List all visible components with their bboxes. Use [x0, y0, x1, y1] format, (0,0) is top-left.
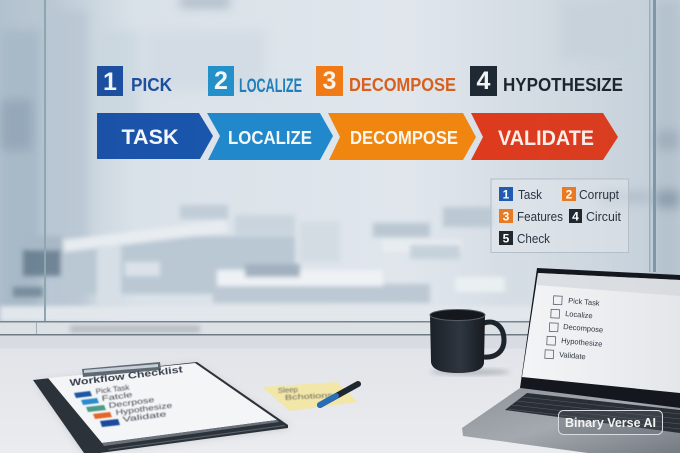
- step 3 badge and label: 3: [323, 67, 336, 95]
- chevron: task: TASK: [122, 126, 178, 149]
- legend item: corrupt: 2: [566, 188, 573, 202]
- legend item: check: 5: [503, 232, 510, 246]
- laptop lid: [520, 268, 680, 408]
- step 4 badge and label: HYPOTHESIZE: [503, 74, 623, 95]
- desk surface: [0, 336, 680, 453]
- laptop: Decompose: [563, 322, 603, 334]
- sticky note: [262, 382, 358, 411]
- step 2 badge and label: [208, 66, 302, 97]
- clipboard board: [33, 362, 288, 453]
- legend item: check: [499, 231, 550, 246]
- step 1 badge and label: PICK: [131, 75, 172, 95]
- coffee mug: [430, 310, 510, 376]
- sticky note: Bchotions: [285, 390, 333, 402]
- legend item: features: [499, 209, 563, 224]
- legend panel: [491, 179, 628, 252]
- laptop: Localize: [565, 309, 593, 320]
- chevron: localize: LOCALIZE: [228, 128, 312, 148]
- step 4 badge and label: 4: [477, 67, 491, 95]
- chevron: task: [97, 113, 213, 159]
- sticky note: Sleep: [278, 385, 298, 395]
- legend item: task: Task: [518, 187, 542, 202]
- checklist rows: Hypothesize: [115, 401, 173, 417]
- legend item: features: Features: [517, 209, 563, 224]
- chevron: validate: [471, 113, 618, 160]
- legend item: circuit: Circuit: [586, 209, 621, 224]
- keyboard: [505, 393, 680, 433]
- laptop: [462, 268, 680, 453]
- step 1 badge and label: 1: [103, 68, 117, 96]
- watermark: Binary Verse AI: Binary Verse AI: [565, 416, 656, 430]
- process chevrons: [97, 113, 618, 160]
- laptop: Validate: [559, 350, 586, 361]
- left dark shapes: [23, 250, 61, 276]
- step header row: [97, 66, 623, 97]
- checklist rows: [74, 383, 173, 427]
- distant bed: [213, 284, 430, 303]
- legend item: corrupt: Corrupt: [579, 187, 619, 202]
- checklist rows: Fatcle: [101, 390, 133, 403]
- legend item: task: [499, 187, 542, 202]
- window frame: [0, 0, 680, 336]
- metal clip: [82, 362, 161, 377]
- sticky note with pen: [262, 382, 358, 411]
- pen: [320, 384, 358, 405]
- chevron: decompose: [328, 113, 476, 160]
- step 3 badge and label: [316, 66, 456, 96]
- laptop: Hypothesize: [561, 336, 603, 349]
- step 4 badge and label: [470, 66, 623, 96]
- checklist rows: Decrpose: [108, 395, 155, 410]
- laptop: Pick Task: [568, 296, 600, 308]
- clipboard paper: [48, 363, 277, 443]
- step 2 badge and label: LOCALIZE: [239, 76, 302, 97]
- checklist rows: Validate: [122, 409, 167, 424]
- legend item: features: 3: [503, 210, 510, 224]
- chevron: localize: [207, 113, 333, 160]
- watermark: Binary Verse AI: [558, 410, 662, 434]
- step 2 badge and label: 2: [214, 67, 228, 95]
- laptop base: [462, 388, 680, 453]
- blurred office background: [0, 0, 680, 325]
- checklist rows: Pick Task: [95, 383, 130, 396]
- legend item: circuit: [569, 209, 621, 224]
- legend item: check: Check: [517, 231, 550, 246]
- laptop screen: [522, 273, 680, 393]
- on-screen checklist: [545, 296, 562, 359]
- legend item: task: 1: [503, 188, 510, 202]
- legend item: corrupt: [562, 187, 619, 202]
- chevron: decompose: DECOMPOSE: [350, 128, 458, 148]
- legend item: circuit: 4: [572, 210, 579, 224]
- distant building: [60, 236, 295, 294]
- step 3 badge and label: DECOMPOSE: [349, 74, 456, 95]
- step 1 badge and label: [97, 66, 172, 96]
- clipboard: [33, 362, 290, 453]
- chevron: validate: VALIDATE: [498, 127, 594, 150]
- checklist title: Workflow Checklist: [69, 364, 183, 388]
